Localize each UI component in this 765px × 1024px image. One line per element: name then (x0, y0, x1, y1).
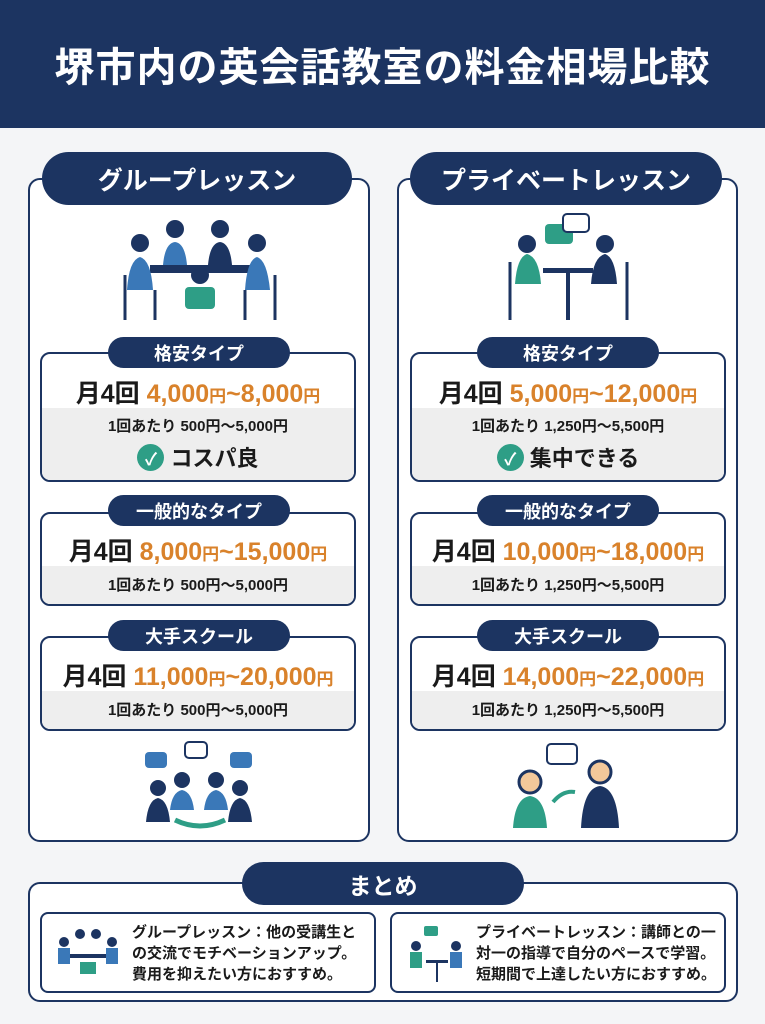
card: private general: 月4回 10,000円~18,000円 (432, 538, 704, 566)
text: private summary (476, 924, 716, 983)
card: group budget: コスパ良 (170, 446, 258, 471)
label: general type: 一般的なタイプ (505, 502, 631, 522)
panel: summary (28, 882, 738, 1002)
icon: teacher student (513, 743, 619, 828)
text: group summary: の交流でモチベーションアップ。 (132, 945, 356, 962)
heading: summary: まとめ (348, 872, 418, 898)
summary: group (40, 912, 376, 993)
card: private general: 1回あたり 1,250円～5,500円 (472, 577, 664, 594)
card: group general: 月4回 8,000円~15,000円 (69, 538, 327, 566)
heading: private: プライベートレッスン (441, 166, 691, 194)
card: group general: 1回あたり 500円～5,000円 (108, 577, 288, 594)
card: private budget: 集中できる (530, 446, 639, 471)
card: private general (410, 512, 726, 606)
heading: summary (242, 862, 524, 905)
card: group general (40, 512, 356, 606)
label: major school (477, 620, 659, 651)
icon: private small (410, 926, 462, 982)
label: budget type: 格安タイプ (523, 344, 613, 364)
icon: group meeting (124, 220, 276, 320)
panel: group lesson (28, 178, 370, 842)
card: private budget (410, 352, 726, 482)
icon: group discussion (145, 741, 252, 828)
card: private budget: ✓ (504, 450, 516, 468)
text: private summary: 短期間で上達したい方におすすめ。 (476, 966, 716, 983)
text: group summary: グループレッスン：他の受講生と (132, 924, 356, 941)
label: general type (108, 495, 290, 526)
text: group summary (132, 924, 356, 983)
label: budget type (108, 337, 290, 368)
label: general type (477, 495, 659, 526)
summary: private (390, 912, 726, 993)
card: group major (40, 636, 356, 731)
text: private summary: プライベートレッスン：講師との一 (476, 924, 716, 941)
text: private summary: 対一の指導で自分のペースで学習。 (476, 945, 715, 962)
label: budget type (477, 337, 659, 368)
icon: group small (58, 929, 118, 974)
label: major school: 大手スクール (145, 626, 253, 646)
card: private major: 1回あたり 1,250円～5,500円 (472, 702, 664, 719)
card: group budget (40, 352, 356, 482)
label: major school: 大手スクール (514, 626, 622, 646)
title (0, 0, 765, 128)
card: group major: 月4回 11,000円~20,000円 (62, 663, 334, 691)
card: private budget: 1回あたり 1,250円～5,500円 (472, 418, 664, 435)
heading: private (410, 152, 722, 205)
heading: group (42, 152, 352, 205)
panel: private lesson (397, 178, 738, 842)
card: private major (410, 636, 726, 731)
label: general type: 一般的なタイプ (136, 502, 262, 522)
card: private major: 月4回 14,000円~22,000円 (432, 663, 704, 691)
card: group budget: ✓ (145, 450, 157, 468)
icon: one on one (508, 213, 628, 320)
label: budget type: 格安タイプ (154, 344, 244, 364)
label: major school (108, 620, 290, 651)
card: group budget: 1回あたり 500円～5,000円 (108, 418, 288, 435)
card: group budget: 月4回 4,000円~8,000円 (76, 380, 320, 408)
card: private budget: 月4回 5,000円~12,000円 (439, 380, 697, 408)
title: 堺市内の英会話教室の料金相場比較 (54, 46, 710, 90)
text: group summary: 費用を抑えたい方におすすめ。 (132, 966, 342, 983)
heading: group: グループレッスン (98, 166, 296, 194)
card: group major: 1回あたり 500円～5,000円 (108, 702, 288, 719)
